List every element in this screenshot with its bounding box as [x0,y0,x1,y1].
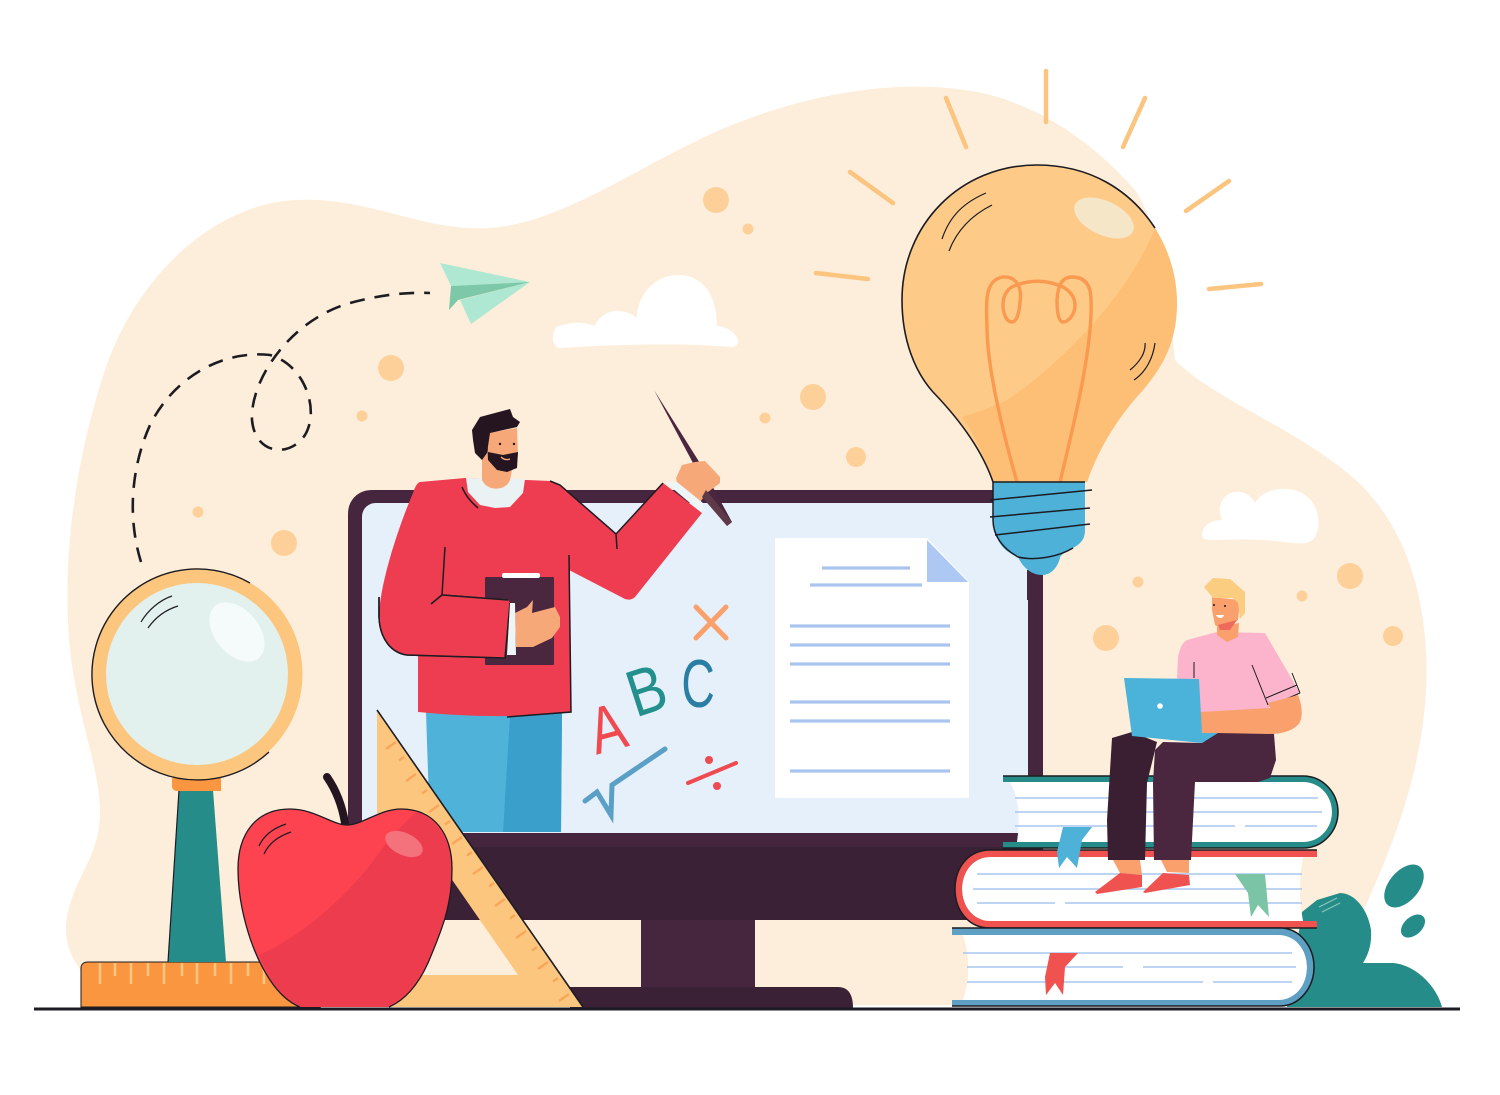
magnifier collar [172,778,221,791]
student shirt [1177,632,1300,712]
book: middle [955,850,1317,928]
book: top [1003,776,1338,848]
check mark [585,749,665,815]
light bulb [902,165,1177,600]
teacher hand on book [515,600,560,647]
student arm [1200,695,1302,734]
stack of books [952,776,1338,1006]
set square ruler [377,710,583,1007]
teacher sweater [379,478,702,716]
plant [1287,857,1442,1007]
student collar shadow [1218,620,1237,630]
bulb shade [962,228,1177,482]
handwritten letters ABC [581,646,715,769]
monitor frame [348,490,1043,850]
teacher collar [466,478,525,508]
apple shade [259,811,452,1007]
light rays [816,71,1261,289]
student neck [1217,623,1239,642]
bulb glass [902,165,1177,482]
divide sign [688,756,736,790]
teacher sleeve cuff [507,603,516,655]
teacher beard [487,437,518,472]
bookmark: blue [1057,827,1092,868]
teacher sweater outlines [379,481,663,717]
handwritten letters ABC: C [681,646,715,722]
handwritten letters ABC: B [617,650,676,731]
student back leg [1107,732,1157,860]
ruler at base [81,962,320,1007]
pointer stick [654,390,732,526]
teacher eyes [499,443,515,445]
monitor stand [641,920,755,988]
student smile [1216,615,1224,618]
monitor chin [440,833,1020,920]
bookmark: green [1235,874,1269,917]
student shoes [1095,873,1142,894]
apple body [238,809,452,1007]
bulb filament [987,277,1091,482]
bulb highlight [1068,189,1140,247]
book: bottom [952,928,1314,1006]
teacher hair [472,409,520,460]
ground line [34,1008,1460,1010]
student eyes [1213,604,1226,607]
bulb outline [902,165,1155,482]
magnifier rim [92,568,302,780]
student ankles [1113,860,1189,875]
student front leg [1153,733,1276,860]
student [1095,578,1302,894]
laptop [1124,678,1218,743]
teacher cuff [665,482,703,513]
handwritten letters ABC: A [581,688,634,769]
magnifying glass [92,568,302,962]
student hair [1204,578,1245,619]
monitor [348,490,1043,1008]
bookmark: red [1045,953,1078,995]
monitor column under bulb [1027,570,1043,600]
cloud: upper [553,275,738,348]
teacher forearm over book [379,595,510,658]
student shirt lines [1194,662,1300,706]
student head [1212,597,1240,630]
magnifier stem [168,790,226,962]
document page [775,538,969,798]
apple stem [327,777,345,823]
teacher [379,390,732,832]
stick handle over hand [702,490,732,526]
bulb base [993,482,1085,575]
monitor screen [362,503,1028,833]
apple [238,777,452,1007]
paper plane flight path [133,293,430,562]
decorative dots [192,187,1403,651]
teacher raised hand [676,461,720,502]
book in hand [485,577,554,665]
background blob [66,87,1426,1005]
apple outline [238,809,452,1007]
teacher trousers [426,712,562,832]
teacher neck and face [482,428,518,489]
magnifier lens [106,583,288,765]
icon: paper plane [440,263,530,324]
multiply sign [696,607,726,638]
cloud: lower [1202,489,1319,543]
monitor base [570,987,853,1008]
teacher smile [501,457,510,460]
